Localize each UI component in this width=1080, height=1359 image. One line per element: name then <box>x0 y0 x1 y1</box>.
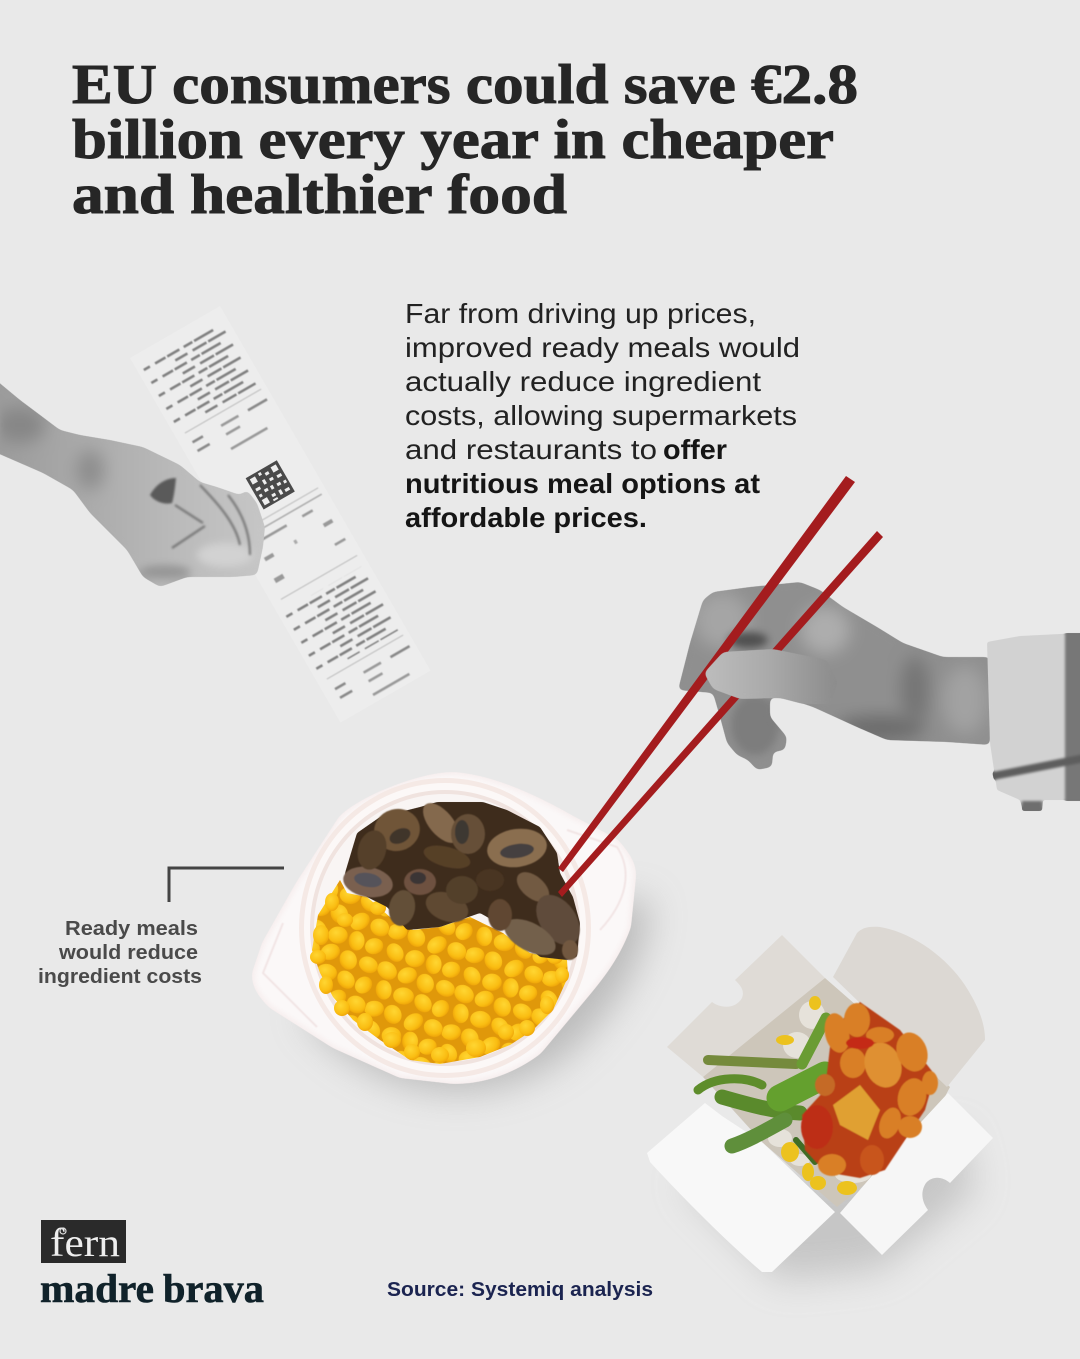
icon: sleeve cuff <box>987 633 1080 811</box>
title: billion every year in cheaper <box>72 109 834 171</box>
text block: explanation: Far from driving up prices, <box>405 298 756 329</box>
icon: receipt <box>130 306 431 723</box>
food: green beans <box>698 1018 826 1162</box>
text block: explanation <box>405 298 800 533</box>
callout: ready meals: Ready meals <box>65 917 198 940</box>
logo: madre brava: madre <box>40 1266 154 1311</box>
icon: QR code <box>246 460 295 509</box>
text block: explanation: offer <box>663 434 727 465</box>
callout: ready meals: ingredient costs <box>38 965 202 988</box>
icon: chopsticks <box>558 476 883 897</box>
food: corn <box>310 880 569 1064</box>
icon: ready meal bowl <box>38 476 993 1311</box>
icon: takeaway box <box>647 927 993 1280</box>
text block: explanation: costs, allowing supermarkets <box>405 400 797 431</box>
text block: explanation: actually reduce ingredient <box>405 366 761 397</box>
source: Source: Systemiq analysis <box>387 1279 653 1301</box>
title: and healthier food <box>72 164 567 226</box>
icon: left hand holding receipt <box>0 375 265 587</box>
icon: right hand with sleeve <box>678 582 1080 811</box>
text block: explanation: improved ready meals would <box>405 332 800 363</box>
title <box>72 54 858 226</box>
callout: ready meals <box>38 868 284 988</box>
callout: ready meals: would reduce <box>58 941 198 964</box>
logo: madre brava <box>40 1266 264 1311</box>
title: EU consumers could save €2.8 <box>72 54 858 116</box>
box flaps <box>647 1093 993 1272</box>
text block: explanation: nutritious meal options at <box>405 468 760 499</box>
text block: explanation: affordable prices. <box>405 502 647 533</box>
food: rice <box>768 1001 871 1183</box>
food: mushrooms <box>341 797 589 963</box>
food: beans in red sauce <box>801 1002 938 1178</box>
text block: explanation: and restaurants to <box>405 434 657 465</box>
icon: thumb <box>704 649 838 704</box>
logo: fern: fern <box>50 1220 120 1265</box>
food: corn pieces <box>776 996 857 1195</box>
logo: madre brava: brava <box>163 1266 264 1311</box>
